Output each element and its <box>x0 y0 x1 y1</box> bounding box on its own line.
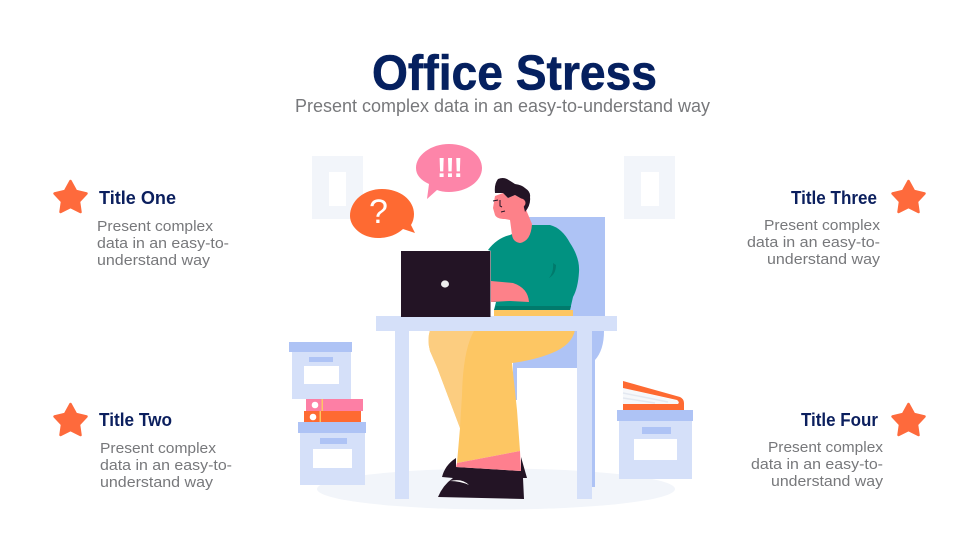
speech bubble: exclamation: !!! <box>437 152 463 183</box>
star icon <box>54 404 86 435</box>
item: title one <box>54 181 229 269</box>
body text: understand way <box>100 474 214 491</box>
sweater shadow <box>494 263 571 310</box>
body text: Present complex <box>768 439 884 456</box>
star icon <box>892 181 924 212</box>
sock <box>456 451 521 471</box>
hair <box>495 178 530 212</box>
binders <box>304 399 363 422</box>
body text: data in an easy-to- <box>751 456 883 473</box>
body text: data in an easy-to- <box>747 234 880 251</box>
body text: data in an easy-to- <box>97 235 229 252</box>
body text: understand way <box>767 251 881 268</box>
eye and mouth <box>493 200 505 212</box>
laptop <box>401 251 490 317</box>
person <box>488 178 579 316</box>
heading: Title Three <box>791 188 877 208</box>
body text <box>100 440 232 491</box>
subtitle: Present complex data in an easy-to-understand way <box>295 96 710 116</box>
wall frame left <box>312 156 363 219</box>
floor shadow <box>317 468 675 510</box>
item: title two <box>54 404 232 491</box>
item: title three <box>747 181 924 268</box>
body text <box>747 217 881 268</box>
wall frame right <box>624 156 675 219</box>
box right <box>617 410 693 479</box>
waistband <box>494 310 573 316</box>
face and neck <box>493 193 532 243</box>
body text <box>751 439 884 490</box>
arm <box>491 281 529 302</box>
heading: Title Four <box>801 410 878 430</box>
ear <box>516 198 526 208</box>
speech bubble: question <box>350 189 415 238</box>
body text: data in an easy-to- <box>100 457 232 474</box>
trousers <box>428 330 575 463</box>
sweater <box>488 225 579 310</box>
chair <box>513 217 605 487</box>
star icon <box>54 181 86 212</box>
heading: Title Two <box>99 410 172 430</box>
item: title four <box>751 404 924 490</box>
table <box>376 316 617 499</box>
box top left <box>289 342 352 399</box>
body text: understand way <box>771 473 884 490</box>
star icon <box>892 404 924 435</box>
folder on box <box>623 381 684 410</box>
body text: Present complex <box>100 440 217 457</box>
body text: understand way <box>97 252 211 269</box>
speech bubble: exclamation <box>416 144 482 199</box>
body text <box>97 218 229 269</box>
shoes <box>438 451 527 499</box>
speech bubble: question: ? <box>369 193 388 231</box>
box bottom left <box>298 422 366 485</box>
body text: Present complex <box>764 217 881 234</box>
body text: Present complex <box>97 218 214 235</box>
heading: Title One <box>99 188 176 208</box>
title: Office Stress <box>372 46 657 100</box>
